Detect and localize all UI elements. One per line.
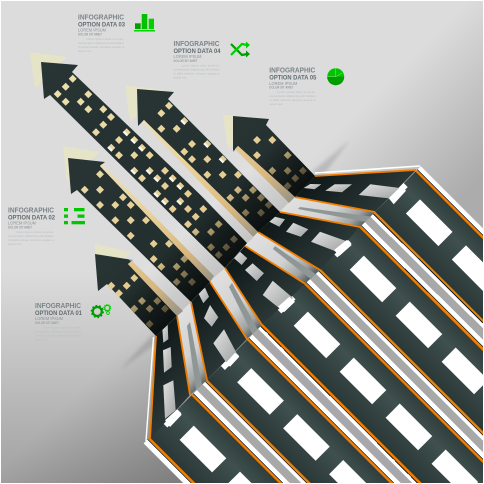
text block: option data 01: DOLOR SIT AMET [35,321,59,325]
arrow 4 [137,89,280,232]
lower road band section [144,166,484,484]
text block: option data 03: OPTION DATA 03 [78,22,125,28]
upper converging road section [146,166,420,441]
text block: option data 01: in elitd metuet, tempus augue a [35,334,82,338]
text block: option data 04: Lorem ipsum dolor sit amet, [182,64,220,68]
icon: bar chart [134,14,155,32]
text block: option data 02: INFOGRAPHIC [8,206,55,214]
road 3 lower [262,282,484,484]
text block: option data 05: DOLOR SIT AMET [269,85,293,89]
text block: option data 03: DOLOR SIT AMET [78,32,102,36]
road outer edges [146,166,420,441]
icon: pie chart [327,68,344,85]
text block: option data 04: OPTION DATA 04 [174,48,221,55]
text block: option data 01: INFOGRAPHIC [35,301,82,310]
text block: option data 04: auctor nec. [174,76,188,80]
text block: option data 04: consectetur adipiscing elit.Nullam [174,68,220,72]
icon: list [64,208,85,224]
road 2 lower [206,339,393,484]
text block: option data 05: LOREM IPSUM [269,81,297,86]
road 2 upper [191,282,247,380]
text block: option data 01: Lorem ipsum dolor sit amet, [43,326,81,330]
road 5 lower [374,170,484,322]
arrow 2 [68,158,210,302]
bottom outer edge [144,437,196,484]
text block: option data 02: LOREM IPSUM [8,221,36,226]
text block: option data 03: in elitd metuet, tempus augue a [78,45,125,49]
text block: option data 03: LOREM IPSUM [78,28,106,33]
text block: option data 03: consectetur adipiscing elit.Nullam [78,41,124,45]
pale arrow heads behind [30,52,262,282]
upper stripe 1-2 [177,302,207,395]
text block: option data 05 [269,66,317,106]
text block: option data 01 [35,301,82,342]
upper stripe 2-3 [210,268,262,339]
stripe between roads 5 and 4 [359,212,484,352]
text block: option data 05: in elitd metuet, tempus augue a [269,98,316,102]
text block: option data 04: LOREM IPSUM [174,54,202,59]
upper stripe 4-5 [280,197,375,227]
text block: option data 01: auctor nec. [35,338,49,342]
icon: shuffle arrows [231,42,250,58]
arrow base shading [126,145,315,336]
text block: option data 03 [78,12,125,53]
text block: option data 01: LOREM IPSUM [35,316,63,321]
arrow 5 [233,116,315,197]
fold shadows on background [120,140,350,370]
text block: option data 03: INFOGRAPHIC [78,12,125,22]
road 1 upper [150,316,190,439]
text block: option data 03: auctor nec. [78,49,92,53]
text block: option data 02: DOLOR SIT AMET [8,225,32,229]
text block: option data 04: INFOGRAPHIC [174,39,220,48]
arrows [41,62,315,336]
stripe between roads 3 and 2 [247,324,423,484]
text block: option data 05: Lorem ipsum dolor sit amet, [277,90,316,94]
text block: option data 05: OPTION DATA 05 [269,75,317,82]
text block: option data 05: consectetur adipiscing elit.Nullam [269,94,315,98]
road 3 upper [225,246,305,325]
text block: option data 02: auctor nec. [8,242,22,246]
text block: option data 02: OPTION DATA 02 [8,214,55,222]
upper stripe 3-4 [245,232,320,284]
text block: option data 05: auctor nec. [269,102,284,106]
text block: option data 05: INFOGRAPHIC [269,66,316,75]
arrow 3 [41,62,247,268]
text block: option data 04 [174,39,221,80]
text block: option data 02: consectetur adipiscing elit.Nullam [8,234,54,238]
text block: option data 03: Lorem ipsum dolor sit amet, [86,37,124,41]
text block: option data 01: consectetur adipiscing elit.Nullam [35,330,81,334]
road 5 upper [295,170,416,212]
text block: option data 02: Lorem ipsum dolor sit amet, [16,230,54,234]
arrow 1 [95,254,177,336]
text block: option data 04: in elitd metuet, tempus augue a [174,72,220,76]
road 4 lower [318,227,484,434]
road 1 lower [148,394,282,484]
top outer edge [415,166,484,240]
road 4 upper [258,212,360,270]
light bands between arrows [100,120,295,316]
text block: option data 01: OPTION DATA 01 [35,310,82,317]
text block: option data 02: in elitd metuet, tempus augue a [8,238,55,242]
stripe between roads 2 and 1 [191,380,312,484]
icon: gears [91,304,111,318]
text block: option data 02 [8,206,55,246]
text block: option data 04: DOLOR SIT AMET [174,59,198,63]
stripe between roads 4 and 3 [303,268,484,464]
